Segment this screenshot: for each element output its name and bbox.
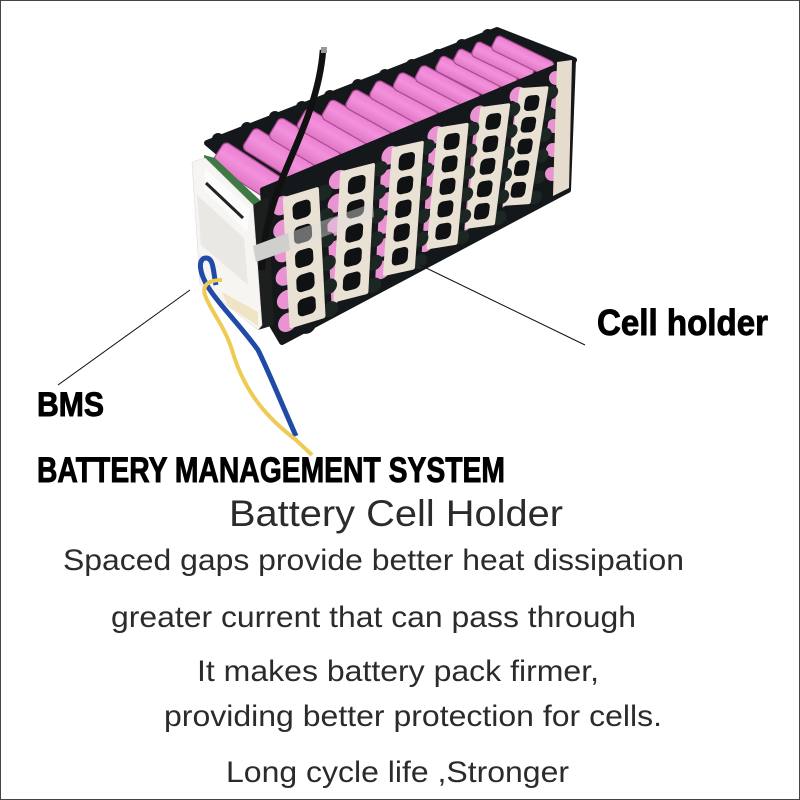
- nickel strip 1: [271, 181, 339, 342]
- nickel strip 3: [372, 136, 436, 289]
- arrow: BMS pointer: [58, 290, 190, 385]
- label: cell holder: Cell holder: [597, 302, 768, 343]
- nickel strip 5: [454, 100, 521, 240]
- cell holder top frame: [207, 29, 574, 190]
- text: firmer pack: It makes battery pack firmer,: [197, 655, 599, 688]
- text: heat dissipation: Spaced gaps provide better heat dissipation: [63, 544, 684, 577]
- label: BMS: BMS: [37, 386, 104, 424]
- nickel strip 7: [545, 60, 572, 196]
- pink battery cells: [211, 35, 555, 202]
- arrow: cell holder pointer: [420, 265, 585, 345]
- clear tape band: [253, 203, 374, 262]
- label: battery management system: BATTERY MANAGEMENT SYSTEM: [37, 451, 505, 490]
- BMS board: [192, 155, 274, 330]
- nickel strip 2: [322, 157, 388, 316]
- text: long cycle life: Long cycle life ,Stronger: [226, 756, 569, 789]
- yellow wire: [204, 280, 312, 455]
- battery pack photo illustration: [192, 29, 574, 455]
- wire terminal: [321, 47, 327, 53]
- heading: Battery Cell Holder: [229, 493, 563, 534]
- blue wire: [200, 258, 296, 436]
- cell holder front face: [263, 60, 573, 342]
- text: protection: providing better protection for cells.: [164, 700, 662, 733]
- nickel strip 4: [416, 119, 480, 261]
- text: greater current: greater current that can pass through: [111, 601, 636, 634]
- nickel strip 6: [491, 84, 559, 216]
- black wire: [262, 50, 323, 270]
